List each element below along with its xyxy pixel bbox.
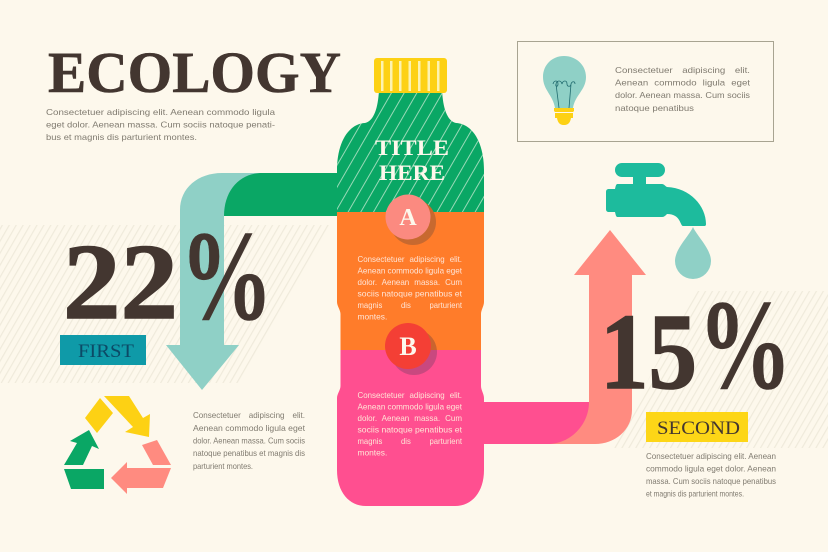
second text: Consectetuer adipiscing elit. Aenean <box>646 451 776 461</box>
pipe: green <box>224 173 342 216</box>
text B: montes. <box>358 448 387 458</box>
arrow: salmon up <box>540 230 646 444</box>
second text: massa. Cum sociis natoque penatibus <box>646 476 776 486</box>
bottle cap <box>374 58 447 93</box>
text B: Aenean commodo ligula eget <box>358 402 463 412</box>
intro text <box>46 107 275 142</box>
box text: natoque penatibus <box>615 103 694 113</box>
intro text: bus et magnis dis parturient montes. <box>46 132 197 142</box>
label: first: FIRST <box>78 341 134 362</box>
text B: magnis dis parturient <box>358 436 463 446</box>
text B: sociis natoque penatibus et <box>358 424 463 434</box>
text B <box>358 390 463 458</box>
second text: commodo ligula eget dolor. Aenean <box>646 464 776 474</box>
intro text: eget dolor. Aenean massa. Cum sociis natoque penati- <box>46 120 275 130</box>
badge A: A <box>399 205 417 231</box>
recycle text <box>193 410 306 471</box>
text A: dolor. Aenean massa. Cum <box>358 277 462 287</box>
info box <box>518 42 774 142</box>
badge A <box>386 194 436 245</box>
badge B <box>385 323 437 375</box>
recycle text: Aenean commodo ligula eget <box>193 423 306 433</box>
icon: light bulb <box>543 56 586 125</box>
second text <box>646 451 776 498</box>
text B: Consectetuer adipiscing elit. <box>358 390 462 400</box>
text A: montes. <box>358 312 387 322</box>
bottle title <box>375 135 449 185</box>
stat: 15%: 15 <box>600 293 697 412</box>
text B: dolor. Aenean massa. Cum <box>358 413 462 423</box>
box text: Aenean commodo ligula eget <box>615 78 751 88</box>
intro text: Consectetuer adipiscing elit. Aenean commodo ligula <box>46 107 275 117</box>
text A: sociis natoque penatibus et <box>358 288 463 298</box>
recycle text: parturient montes. <box>193 461 253 471</box>
title: ECOLOGY <box>48 40 341 105</box>
bottle title: HERE <box>379 160 445 185</box>
stat: 22%: 22 <box>63 223 178 342</box>
pipe: pink <box>478 402 589 444</box>
text A: Aenean commodo ligula eget <box>358 266 463 276</box>
stat: 22% <box>63 205 273 347</box>
text A: Consectetuer adipiscing elit. <box>358 254 462 264</box>
bottle section: orange <box>330 212 490 350</box>
recycle text: natoque penatibus et magnis dis <box>193 448 305 458</box>
bottle section: pink <box>337 350 484 506</box>
bottle section: green <box>337 93 484 212</box>
badge B: B <box>399 332 417 361</box>
recycle text: Consectetuer adipiscing elit. <box>193 410 305 420</box>
label: second: SECOND <box>657 418 740 439</box>
icon: recycle <box>64 396 171 494</box>
label: second <box>646 412 748 442</box>
bottle title: TITLE <box>375 135 449 160</box>
label: first <box>60 335 146 365</box>
box text: Consectetuer adipiscing elit. <box>615 65 750 75</box>
recycle text: dolor. Aenean massa. Cum sociis <box>193 436 305 446</box>
icon: faucet <box>606 163 706 226</box>
arrow: teal down <box>166 173 262 390</box>
stat: 15%: % <box>698 274 792 416</box>
text A: magnis dis parturient <box>358 300 463 310</box>
box text <box>615 65 751 113</box>
stat: 15% <box>600 274 792 416</box>
bottle <box>330 58 490 510</box>
text A <box>358 254 463 322</box>
stat: 22%: % <box>180 205 273 347</box>
second text: et magnis dis parturient montes. <box>646 488 744 498</box>
box text: dolor. Aenean massa. Cum sociis <box>615 90 750 100</box>
icon: water drop <box>675 227 711 279</box>
